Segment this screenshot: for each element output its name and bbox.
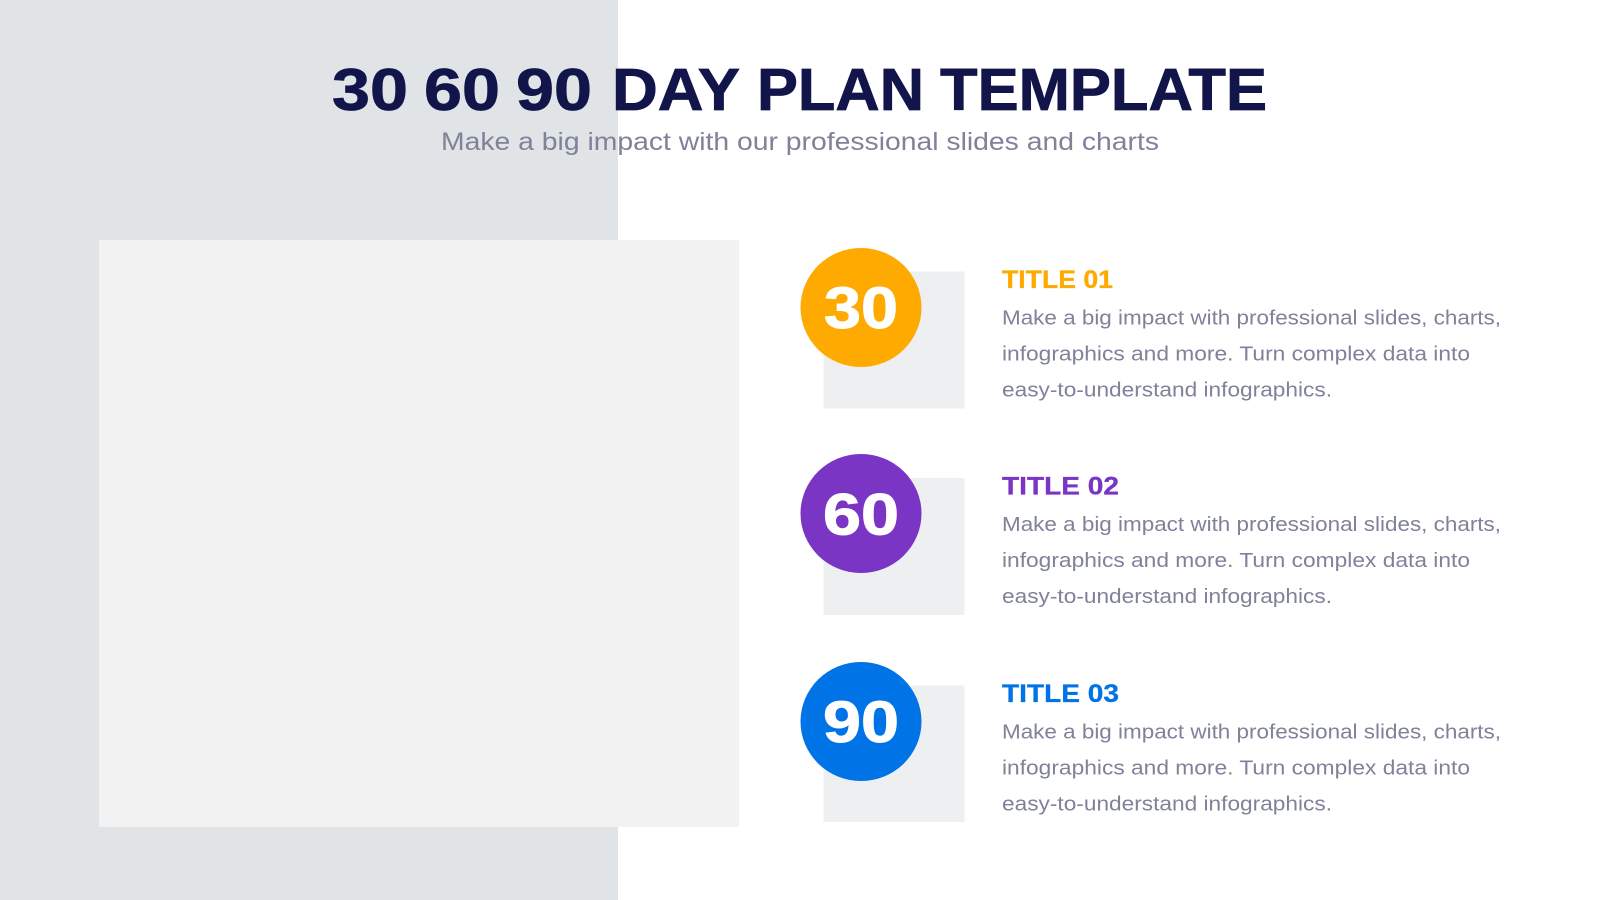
description 03: easy-to-understand infographics. [1002,794,1332,816]
backing square 30 [824,272,964,408]
description 03: Make a big impact with professional slides, charts, [1002,722,1501,744]
description 01: easy-to-understand infographics. [1002,380,1332,402]
description 01 [1002,308,1501,402]
title: TEMPLATE [940,57,1267,123]
badge circle 30 [800,248,922,367]
description 02 [1002,514,1501,608]
title: 30 [332,57,408,123]
heading: title 03: TITLE 03 [1002,680,1119,708]
backing square 90 [824,686,964,822]
title: DAY [612,57,740,123]
description 02: infographics and more. Turn complex data into [1002,550,1470,572]
item: 90 days [800,662,1501,822]
badge circle 60 [800,454,922,573]
heading: title 02: TITLE 02 [1002,472,1119,500]
badge number 30: 30 [824,276,898,341]
image placeholder panel [99,240,739,827]
subtitle: Make a big impact with our professional slides and charts [441,128,1159,156]
item: 30 days [800,248,1501,408]
item: 60 days [800,454,1501,615]
description 01: infographics and more. Turn complex data into [1002,344,1470,366]
title [332,57,1267,123]
description 02: Make a big impact with professional slides, charts, [1002,514,1501,536]
title: PLAN [757,57,924,123]
title: 60 [424,57,500,123]
badge number 90: 90 [823,690,899,755]
backing square 60 [824,478,964,615]
description 03 [1002,722,1501,816]
heading: title 01: TITLE 01 [1002,266,1113,294]
title: 90 [516,57,592,123]
badge number 60: 60 [823,482,899,548]
description 01: Make a big impact with professional slides, charts, [1002,308,1501,330]
description 02: easy-to-understand infographics. [1002,586,1332,608]
description 03: infographics and more. Turn complex data into [1002,758,1470,780]
background panel: grey left block [0,0,618,900]
badge circle 90 [800,662,922,781]
